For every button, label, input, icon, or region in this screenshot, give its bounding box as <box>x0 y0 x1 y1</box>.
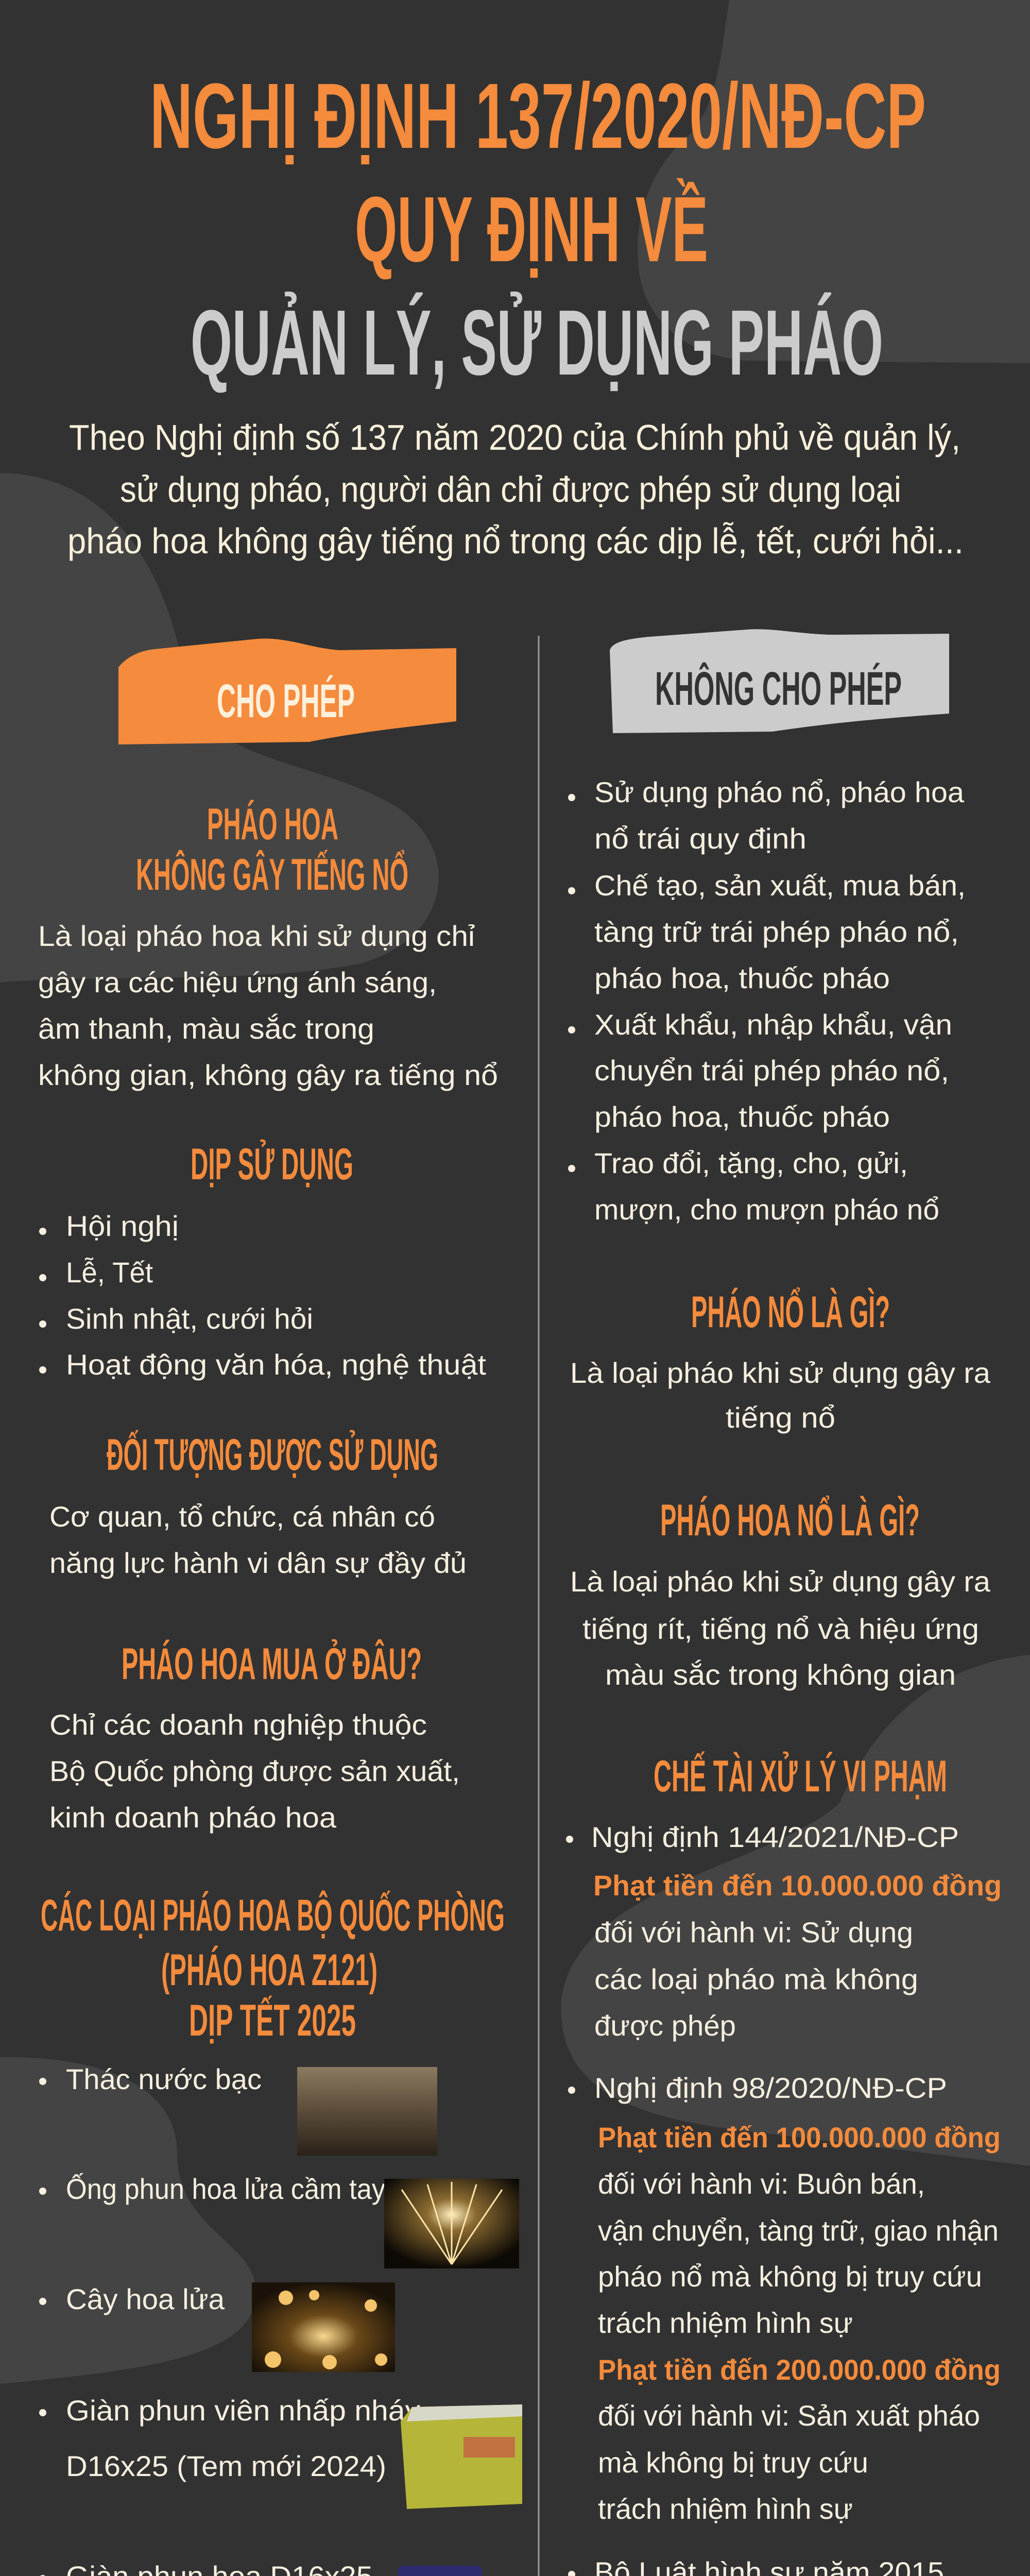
right: chế tài xử lý vi phạm: Nghị định 98/2020/NĐ-CP <box>594 2072 947 2104</box>
right: không cho phép list: pháo hoa, thuốc pháo <box>594 962 890 994</box>
intro paragraph <box>67 417 964 561</box>
right: chế tài xử lý vi phạm: các loại pháo mà không <box>594 1963 918 1995</box>
right: không cho phép list: mượn, cho mượn pháo nổ <box>594 1193 939 1226</box>
left: mua ở đâu <box>49 1639 460 1834</box>
badge: không cho phép <box>610 629 949 733</box>
left: pháo hoa không gây tiếng nổ: KHÔNG GÂY TIẾNG NỔ <box>136 850 408 900</box>
right: không cho phép list <box>568 776 966 1226</box>
right: chế tài xử lý vi phạm: pháo nổ mà không bị truy cứu <box>598 2260 982 2293</box>
left: mua ở đâu: PHÁO HOA MUA Ở ĐÂU? <box>122 1639 422 1689</box>
right: pháo nổ là gì <box>570 1287 991 1434</box>
photo: cây hoa lửa <box>252 2282 395 2372</box>
right: pháo hoa nổ là gì: Là loại pháo khi sử dụng gây ra <box>570 1565 991 1598</box>
left: đối tượng: năng lực hành vi dân sự đầy đủ <box>49 1547 467 1579</box>
left: pháo hoa không gây tiếng nổ: gây ra các hiệu ứng ánh sáng, <box>38 966 437 998</box>
right: không cho phép list: nổ trái quy định <box>594 822 806 855</box>
right: không cho phép list: pháo hoa, thuốc pháo <box>594 1100 890 1133</box>
right: pháo nổ là gì: tiếng nổ <box>726 1401 835 1434</box>
list: product items: D16x25 (Tem mới 2024) <box>66 2450 386 2482</box>
right: chế tài xử lý vi phạm: trách nhiệm hình sự <box>598 2493 853 2525</box>
list: product items <box>39 2063 420 2576</box>
right: không cho phép list: chuyển trái phép pháo nổ, <box>594 1054 949 1087</box>
left: đối tượng <box>49 1430 467 1579</box>
product: purple boxes <box>360 2566 522 2576</box>
badge: cho phép <box>118 639 456 744</box>
badge: cho phép: CHO PHÉP <box>217 674 355 727</box>
left: pháo hoa không gây tiếng nổ <box>38 800 498 1091</box>
list: product items: Thác nước bạc <box>66 2063 262 2095</box>
photo: ống phun hoa lửa <box>384 2179 519 2268</box>
right: không cho phép list: Chế tạo, sản xuất, mua bán, <box>594 869 966 902</box>
left: pháo hoa không gây tiếng nổ: Là loại pháo hoa khi sử dụng chỉ <box>38 920 475 952</box>
product: green box <box>401 2404 522 2509</box>
left: dịp sử dụng: Sinh nhật, cưới hỏi <box>66 1302 313 1335</box>
left: pháo hoa không gây tiếng nổ: âm thanh, màu sắc trong <box>38 1012 374 1045</box>
right: chế tài xử lý vi phạm: đối với hành vi: Sản xuất pháo <box>598 2399 980 2432</box>
right: pháo hoa nổ là gì <box>570 1496 991 1691</box>
title: QUY ĐỊNH VỀ <box>355 178 708 281</box>
list: product items: Giàn phun viên nhấp nháy <box>66 2394 420 2427</box>
left: dịp sử dụng <box>39 1140 486 1381</box>
left: mua ở đâu: Bộ Quốc phòng được sản xuất, <box>49 1755 460 1787</box>
right: chế tài xử lý vi phạm: vận chuyển, tàng trữ, giao nhận <box>598 2214 999 2247</box>
left: dịp sử dụng: DỊP SỬ DỤNG <box>191 1140 353 1189</box>
right: chế tài xử lý vi phạm: đối với hành vi: Sử dụng <box>594 1916 913 1948</box>
right: chế tài xử lý vi phạm: Phạt tiền đến 200.000.000 đồng <box>598 2353 1001 2386</box>
left: các loại pháo hoa: (PHÁO HOA Z121) <box>161 1945 377 1995</box>
left: dịp sử dụng: Lễ, Tết <box>66 1256 153 1289</box>
list: product items: Ống phun hoa lửa cầm tay <box>66 2173 385 2205</box>
right: chế tài xử lý vi phạm: trách nhiệm hình sự <box>598 2307 853 2339</box>
left: đối tượng: Cơ quan, tổ chức, cá nhân có <box>49 1500 435 1533</box>
right: pháo hoa nổ là gì: màu sắc trong không gian <box>605 1658 956 1691</box>
left: các loại pháo hoa: CÁC LOẠI PHÁO HOA BỘ QUỐC PHÒNG <box>41 1891 505 1940</box>
right: pháo hoa nổ là gì: tiếng rít, tiếng nổ và hiệu ứng <box>582 1613 979 1645</box>
right: không cho phép list: Trao đổi, tặng, cho, gửi, <box>594 1147 908 1179</box>
right: không cho phép list: tàng trữ trái phép pháo nổ, <box>594 916 959 948</box>
left: pháo hoa không gây tiếng nổ: PHÁO HOA <box>207 800 338 849</box>
right: pháo nổ là gì: Là loại pháo khi sử dụng gây ra <box>570 1357 991 1389</box>
right: chế tài xử lý vi phạm <box>566 1752 1002 2576</box>
left: pháo hoa không gây tiếng nổ: không gian, không gây ra tiếng nổ <box>38 1059 498 1091</box>
photo: thác nước bạc <box>297 2067 437 2156</box>
right: chế tài xử lý vi phạm: đối với hành vi: Buôn bán, <box>598 2167 925 2200</box>
intro paragraph: Theo Nghị định số 137 năm 2020 của Chính phủ về quản lý, <box>69 417 960 457</box>
intro paragraph: sử dụng pháo, người dân chỉ được phép sử dụng loại <box>120 469 901 510</box>
right: không cho phép list: Sử dụng pháo nổ, pháo hoa <box>594 776 965 808</box>
right: không cho phép list: Xuất khẩu, nhập khẩu, vận <box>594 1008 952 1041</box>
left: các loại pháo hoa: DỊP TẾT 2025 <box>189 1996 356 2045</box>
left: mua ở đâu: kinh doanh pháo hoa <box>49 1801 337 1834</box>
right: chế tài xử lý vi phạm: mà không bị truy cứu <box>598 2446 868 2479</box>
right: chế tài xử lý vi phạm: Nghị định 144/2021/NĐ-CP <box>591 1821 959 1853</box>
intro paragraph: pháo hoa không gây tiếng nổ trong các dịp lễ, tết, cưới hỏi... <box>67 521 964 561</box>
left: dịp sử dụng: Hội nghị <box>66 1210 179 1242</box>
left: mua ở đâu: Chỉ các doanh nghiệp thuộc <box>49 1708 427 1741</box>
title <box>150 64 926 395</box>
right: chế tài xử lý vi phạm: Phạt tiền đến 10.000.000 đồng <box>593 1869 1002 1902</box>
left: dịp sử dụng: Hoạt động văn hóa, nghệ thuật <box>66 1348 486 1381</box>
right: chế tài xử lý vi phạm: Phạt tiền đến 100.000.000 đồng <box>598 2121 1001 2154</box>
left: đối tượng: ĐỐI TƯỢNG ĐƯỢC SỬ DỤNG <box>107 1430 438 1480</box>
list: product items: Cây hoa lửa <box>66 2283 225 2315</box>
left: các loại pháo hoa <box>41 1891 505 2045</box>
right: chế tài xử lý vi phạm: được phép <box>594 2009 736 2042</box>
